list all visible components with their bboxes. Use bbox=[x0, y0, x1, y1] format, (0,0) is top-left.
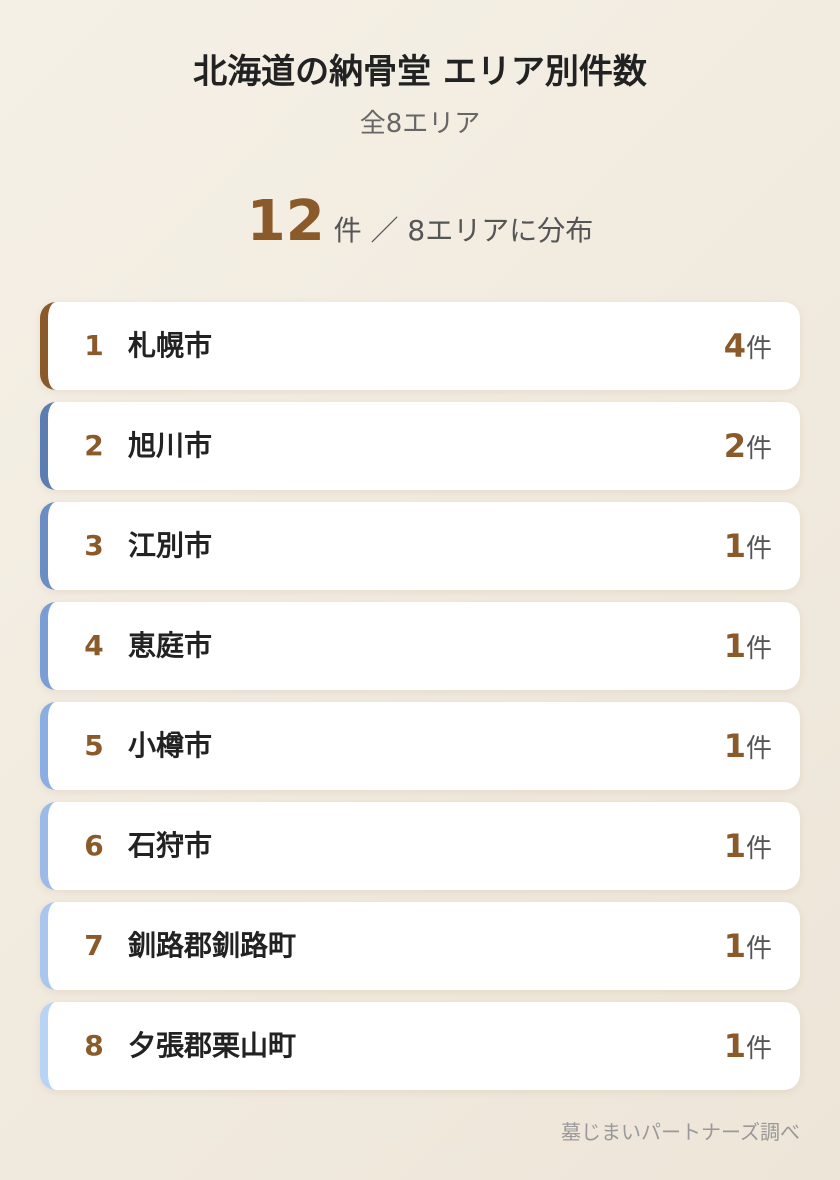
row 1: 札幌市: 4件 bbox=[724, 327, 772, 365]
row 7: 釧路郡釧路町: 7 bbox=[84, 929, 104, 962]
row 5: 小樽市 bbox=[40, 702, 800, 790]
row 7: 釧路郡釧路町 bbox=[40, 902, 800, 990]
row 8: 夕張郡栗山町: 夕張郡栗山町 bbox=[128, 1029, 296, 1062]
row 7: 釧路郡釧路町: 釧路郡釧路町 bbox=[128, 929, 296, 962]
row 5: 小樽市: 1件 bbox=[724, 727, 772, 765]
row 8: 夕張郡栗山町: 8 bbox=[84, 1029, 104, 1062]
row 6: 石狩市: 1件 bbox=[724, 827, 772, 865]
row 1: 札幌市: 1 bbox=[84, 329, 104, 362]
title: 北海道の納骨堂 エリア別件数 bbox=[193, 52, 647, 92]
row 4: 恵庭市: 恵庭市 bbox=[128, 629, 212, 662]
row 7: 釧路郡釧路町: 1件 bbox=[724, 927, 772, 965]
row 6: 石狩市: 6 bbox=[84, 829, 104, 862]
row 4: 恵庭市: 1件 bbox=[724, 627, 772, 665]
row 2: 旭川市: 2件 bbox=[724, 427, 772, 465]
row 3: 江別市: 3 bbox=[84, 529, 104, 562]
row 8: 夕張郡栗山町 bbox=[40, 1002, 800, 1090]
row 3: 江別市: 江別市 bbox=[128, 529, 212, 562]
total summary: 12 件 ／ 8エリアに分布 bbox=[247, 189, 593, 254]
row 1: 札幌市 bbox=[40, 302, 800, 390]
row 6: 石狩市 bbox=[40, 802, 800, 890]
row 2: 旭川市: 旭川市 bbox=[128, 429, 212, 462]
row 5: 小樽市: 小樽市 bbox=[128, 729, 212, 762]
row 5: 小樽市: 5 bbox=[84, 729, 104, 762]
row 4: 恵庭市: 4 bbox=[84, 629, 104, 662]
row 4: 恵庭市 bbox=[40, 602, 800, 690]
row 8: 夕張郡栗山町: 1件 bbox=[724, 1027, 772, 1065]
row 1: 札幌市: 札幌市 bbox=[128, 329, 212, 362]
row 2: 旭川市 bbox=[40, 402, 800, 490]
row 3: 江別市: 1件 bbox=[724, 527, 772, 565]
source note: 墓じまいパートナーズ調べ bbox=[561, 1120, 800, 1144]
row 6: 石狩市: 石狩市 bbox=[128, 829, 212, 862]
row 2: 旭川市: 2 bbox=[84, 429, 104, 462]
subtitle: 全8エリア bbox=[360, 109, 480, 139]
row 3: 江別市 bbox=[40, 502, 800, 590]
